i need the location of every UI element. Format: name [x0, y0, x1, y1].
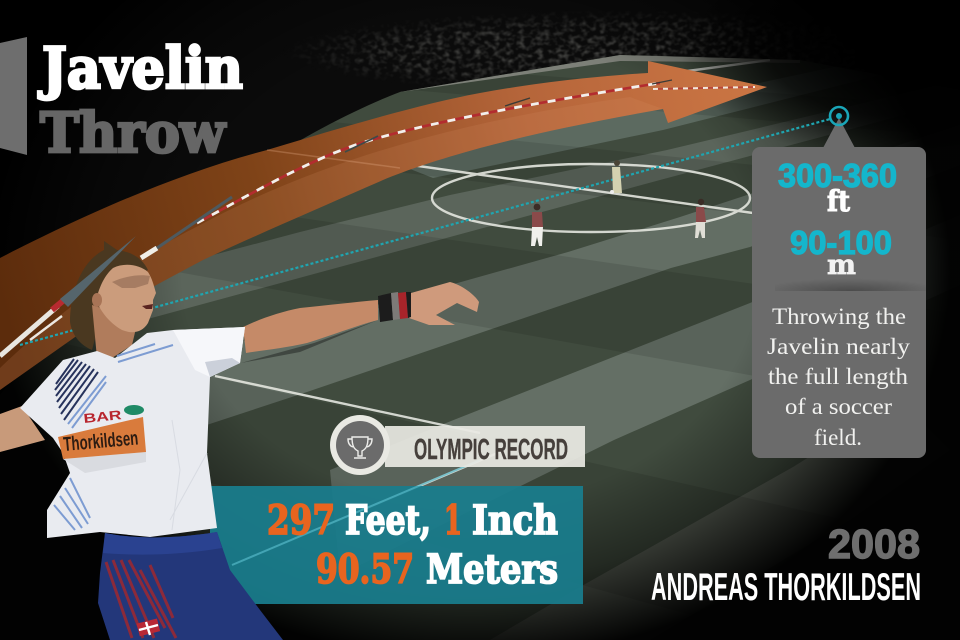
shorts: [98, 532, 283, 640]
face: [96, 265, 156, 332]
title: [0, 35, 243, 165]
athlete credit: [651, 521, 921, 609]
far arm: [0, 406, 45, 452]
javelin tail: [141, 197, 232, 258]
callout panel: field.: [814, 425, 862, 450]
flag patch: [137, 619, 160, 636]
bib and sponsor: [63, 452, 146, 473]
title: Javelin: [37, 35, 243, 102]
javelin in hand: [0, 236, 136, 356]
record stats panel: 297: [267, 497, 335, 544]
record stats panel: Inch: [472, 497, 558, 544]
teal dotted distance line: [20, 119, 830, 345]
callout panel: m: [827, 250, 856, 281]
shirt: [20, 327, 245, 538]
callout panel: ft: [827, 184, 851, 218]
title: Throw: [40, 100, 227, 165]
record stats panel: 1: [444, 497, 462, 544]
arm shadow: [241, 320, 378, 363]
hair back: [70, 241, 148, 350]
olympic record badge: OLYMPIC RECORD: [414, 434, 568, 466]
athlete: Thorkildsen: [63, 428, 139, 456]
callout panel: the full length: [768, 364, 909, 389]
callout panel: Javelin nearly: [767, 334, 911, 359]
flag tab: [0, 37, 27, 155]
small players on the field: [531, 160, 706, 246]
ear: [92, 293, 102, 307]
neck: [92, 305, 138, 358]
shirt stripes: [55, 359, 98, 420]
callout panel: of a soccer: [785, 394, 892, 419]
crowd in stands: [302, 14, 766, 82]
callout panel: Throwing the: [772, 304, 906, 329]
eye shadow: [112, 275, 150, 288]
throwing arm: [243, 300, 378, 353]
athlete credit: 2008: [828, 521, 920, 567]
field lines: [214, 59, 770, 486]
record stats panel: Meters: [426, 546, 558, 593]
orange trajectory arrow: [0, 61, 767, 390]
athlete: [0, 197, 479, 640]
callout panel: [752, 107, 926, 458]
olympic record badge: [330, 415, 585, 475]
hand: [409, 282, 479, 325]
icon: trophy: [348, 437, 372, 458]
record stats panel: 90.57: [316, 546, 414, 593]
callout panel: 90-100: [790, 224, 892, 261]
record stats panel: Feet,: [345, 497, 431, 544]
wristbands: [378, 293, 393, 322]
javelin flight path: [197, 80, 755, 223]
athlete: BAR: [83, 407, 123, 426]
mouth: [142, 304, 153, 309]
pointer: [823, 118, 855, 148]
callout panel: 300-360: [778, 157, 897, 194]
record stats panel: [210, 460, 583, 604]
